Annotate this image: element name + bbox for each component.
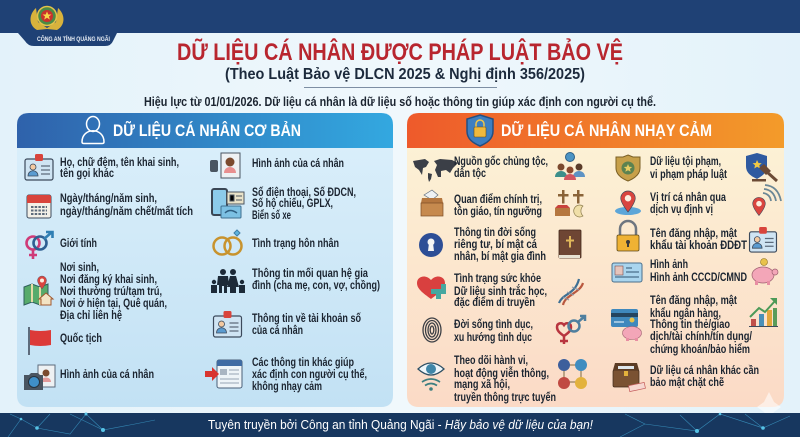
- item: dates: [27, 193, 193, 218]
- text: addresses: Địa chỉ liên hệ: [60, 310, 122, 322]
- text: e-account login: khẩu tài khoản ĐDĐT: [650, 240, 747, 252]
- text: other sensitive data: bảo mật chặt chẽ: [650, 377, 724, 389]
- item: portrait: [210, 153, 344, 178]
- item: political and religious views: [421, 190, 584, 218]
- item: behaviour tracking: [418, 355, 587, 404]
- icon: phone, id card, plate: [212, 189, 244, 218]
- text: ethnic origin: Nguồn gốc chủng tộc,: [454, 156, 548, 168]
- icon: DNA helix: [559, 279, 583, 305]
- intro sentence: Hiệu lực từ 01/01/2026. Dữ liệu cá nhân là dữ liệu số hoặc thông tin giúp xác định con người cụ thể.: [144, 95, 656, 109]
- icon: holy book: [559, 230, 581, 258]
- icon: calendar: [27, 195, 51, 218]
- text: political and religious views: Quan điểm chính trị,: [454, 194, 542, 206]
- text: name: [60, 157, 179, 180]
- text: criminal data: Dữ liệu tội phạm,: [650, 156, 721, 168]
- text: phone and documents: Số hộ chiếu, GPLX,: [252, 198, 333, 210]
- text: private life: Thông tin đời sống: [454, 227, 536, 239]
- icon: id badge: [25, 154, 53, 180]
- text: name: Họ, chữ đệm, tên khai sinh,: [60, 157, 179, 169]
- icon: social network: [558, 359, 587, 389]
- icon: portrait photo: [210, 153, 240, 178]
- text: dates: Ngày/tháng/năm sinh,: [60, 193, 157, 205]
- text: digital account: [252, 313, 361, 337]
- icon: red flag: [28, 327, 51, 355]
- icon: pin with signal: [753, 185, 781, 216]
- title: DỮ LIỆU CÁ NHÂN ĐƯỢC PHÁP LUẬT BẢO VỆ: [177, 37, 623, 66]
- text: bank login and transactions: [650, 295, 753, 356]
- item: name: [25, 154, 179, 180]
- item: personal image: [24, 365, 154, 390]
- text: addresses: Nơi sinh,: [60, 262, 99, 274]
- icon: religious symbols: [555, 190, 584, 217]
- text: dates: ngày/tháng/năm chết/mất tích: [60, 206, 193, 218]
- text: private life: riêng tư, bí mật cá: [454, 239, 537, 251]
- icon: shield with padlock: [467, 115, 493, 146]
- text: behaviour tracking: mạng xã hội,: [454, 379, 510, 391]
- text: addresses: [60, 262, 167, 322]
- text: behaviour tracking: hoạt động viễn thông,: [454, 367, 549, 380]
- text: family relations: Thông tin mối quan hệ gia: [252, 268, 368, 280]
- text: id images: [650, 259, 747, 284]
- icon: account badge: [214, 311, 242, 337]
- item: ethnic origin: [413, 152, 585, 182]
- text: addresses: Nơi thường trú/tạm trú,: [60, 286, 162, 298]
- text: other information: xác định con người cụ thể,: [252, 369, 367, 381]
- text: criminal data: [650, 156, 727, 181]
- text: bank login and transactions: Tên đăng nhập, mật: [650, 295, 737, 307]
- text: other information: [252, 357, 367, 393]
- item: marital status: [214, 230, 339, 254]
- text: family relations: [252, 268, 380, 292]
- text: health and biometrics: Dữ liệu sinh trắc học,: [454, 285, 547, 298]
- icon: gender symbols: [26, 232, 52, 259]
- top header band: [0, 0, 800, 33]
- text: sexual life: xu hướng tình dục: [454, 332, 532, 344]
- text: health and biometrics: đặc điểm di truyền: [454, 297, 535, 309]
- text: gender: Giới tính: [60, 238, 97, 250]
- icon: camera and portrait: [24, 365, 55, 390]
- header text: DỮ LIỆU CÁ NHÂN CƠ BẢN: [113, 120, 301, 140]
- icon: people and globe: [555, 152, 585, 180]
- text: dates: [60, 193, 193, 218]
- item: digital account: [214, 311, 361, 337]
- text: private life: nhân, bí mật gia đình: [454, 251, 546, 263]
- footer text: Tuyên truyền bởi Công an tỉnh Quảng Ngãi - Hãy bảo vệ dữ liệu của bạn!: [208, 417, 593, 432]
- item: location: [615, 185, 781, 216]
- text: digital account: Thông tin về tài khoản số: [252, 313, 361, 325]
- text: private life: [454, 227, 546, 263]
- item: id images: [612, 258, 778, 285]
- text: bank login and transactions: Thông tin thẻ/giao: [650, 319, 730, 331]
- icon: location pin on disc: [615, 191, 641, 215]
- item: gender: [26, 232, 97, 259]
- item: nationality: [28, 327, 102, 355]
- text: other information: không nhạy cảm: [252, 381, 322, 393]
- item: e-account login: [617, 221, 776, 252]
- icon: rings: [214, 230, 242, 254]
- subtitle: (Theo Luật Bảo vệ DLCN 2025 & Nghị định 356/2025): [225, 66, 585, 83]
- item: private life: [419, 227, 581, 263]
- text: other information: Các thông tin khác giúp: [252, 357, 354, 369]
- icon: login badge: [750, 227, 776, 252]
- icon: shield and gavel: [746, 153, 777, 182]
- icon: rising bar chart: [749, 298, 778, 326]
- text: behaviour tracking: Theo dõi hành vi,: [454, 355, 528, 367]
- icon: heart with cross: [417, 276, 446, 299]
- item: health and biometrics: [417, 273, 583, 309]
- item: other information: [205, 357, 367, 393]
- icon: person outline: [82, 116, 104, 144]
- text: e-account login: [650, 228, 747, 252]
- panel: basic personal data: [17, 113, 393, 407]
- item: addresses: [24, 262, 167, 322]
- text: sexual life: Đời sống tình dục,: [454, 319, 533, 331]
- text: id images: Hình ảnh CCCD/CMND: [650, 272, 747, 284]
- item: bank login and transactions: [611, 295, 778, 356]
- icon: ballot box: [421, 190, 443, 216]
- item: sexual life: [423, 316, 585, 344]
- text: addresses: Nơi ở hiện tại, Quê quán,: [60, 298, 167, 310]
- text: phone and documents: Số điện thoại, Số ĐDCN,: [252, 187, 356, 199]
- item: phone and documents: [212, 187, 356, 222]
- icon: keyhole: [419, 233, 443, 257]
- header text: DỮ LIỆU CÁ NHÂN NHẠY CẢM: [501, 120, 712, 140]
- text: criminal data: vi phạm pháp luật: [650, 169, 727, 181]
- text: political and religious views: [454, 194, 542, 218]
- text: location: dịch vụ định vị: [650, 204, 713, 216]
- panel body: [17, 148, 393, 407]
- text: behaviour tracking: [454, 355, 556, 404]
- icon: map with pin and house: [24, 276, 53, 305]
- icon: id card: [612, 263, 642, 282]
- text: ethnic origin: dân tộc: [454, 168, 486, 180]
- text: ethnic origin: [454, 156, 548, 180]
- item: other sensitive data: [613, 363, 759, 392]
- icon: gender hearts: [557, 316, 585, 344]
- icon: police badge: [616, 155, 640, 181]
- text: health and biometrics: Tình trạng sức khỏe: [454, 273, 541, 285]
- icon: document with arrow: [205, 360, 242, 388]
- icon: eye and wifi: [418, 363, 444, 391]
- text: marital status: Tình trạng hôn nhân: [252, 238, 339, 250]
- text: e-account login: Tên đăng nhập, mật: [650, 228, 737, 240]
- text: name: tên gọi khác: [60, 168, 114, 180]
- item: family relations: [211, 268, 380, 293]
- text: bank login and transactions: chứng khoán/bảo hiểm: [650, 344, 750, 356]
- icon: fingerprint: [423, 318, 441, 342]
- icon: treasure chest with stamp: [613, 363, 645, 392]
- text: nationality: Quốc tịch: [60, 333, 102, 345]
- text: addresses: Nơi đăng ký khai sinh,: [60, 274, 157, 286]
- text: location: [650, 192, 726, 216]
- text: digital account: của cá nhân: [252, 325, 303, 337]
- text: phone and documents: [252, 187, 356, 222]
- icon: world map: [413, 159, 458, 182]
- text: behaviour tracking: truyền thông trực tuyến: [454, 392, 556, 404]
- text: phone and documents: Biển số xe: [252, 210, 291, 222]
- text: personal image: Hình ảnh của cá nhân: [60, 369, 154, 381]
- logo caption: CÔNG AN TỈNH QUẢNG NGÃI: [37, 35, 110, 43]
- panel body: [407, 148, 784, 407]
- panel header: [17, 113, 393, 148]
- icon: piggy bank: [752, 258, 778, 285]
- text: political and religious views: tôn giáo, tín ngưỡng: [454, 206, 542, 218]
- logo: Công an tỉnh Quảng Ngãi: [18, 6, 117, 46]
- text: location: Vị trí cá nhân qua: [650, 192, 726, 204]
- text: sexual life: [454, 319, 533, 344]
- text: bank login and transactions: dịch/tài chính/tín dụng/: [650, 331, 753, 343]
- text: other sensitive data: Dữ liệu cá nhân khác cần: [650, 365, 759, 377]
- panel header: [407, 113, 784, 148]
- text: health and biometrics: [454, 273, 547, 309]
- text: bank login and transactions: khẩu ngân hàng,: [650, 308, 721, 320]
- text: portrait: Hình ảnh của cá nhân: [252, 158, 344, 170]
- footer band: [0, 412, 800, 437]
- text: other sensitive data: [650, 365, 759, 389]
- text: id images: Hình ảnh: [650, 259, 688, 271]
- icon: credit card and piggy bank: [611, 309, 642, 341]
- text: family relations: đình (cha mẹ, con, vợ, chồng): [252, 280, 380, 292]
- icon: family silhouettes: [211, 269, 245, 293]
- icon: padlock: [617, 221, 639, 251]
- item: criminal data: [616, 153, 777, 182]
- panel: sensitive personal data: [407, 113, 784, 407]
